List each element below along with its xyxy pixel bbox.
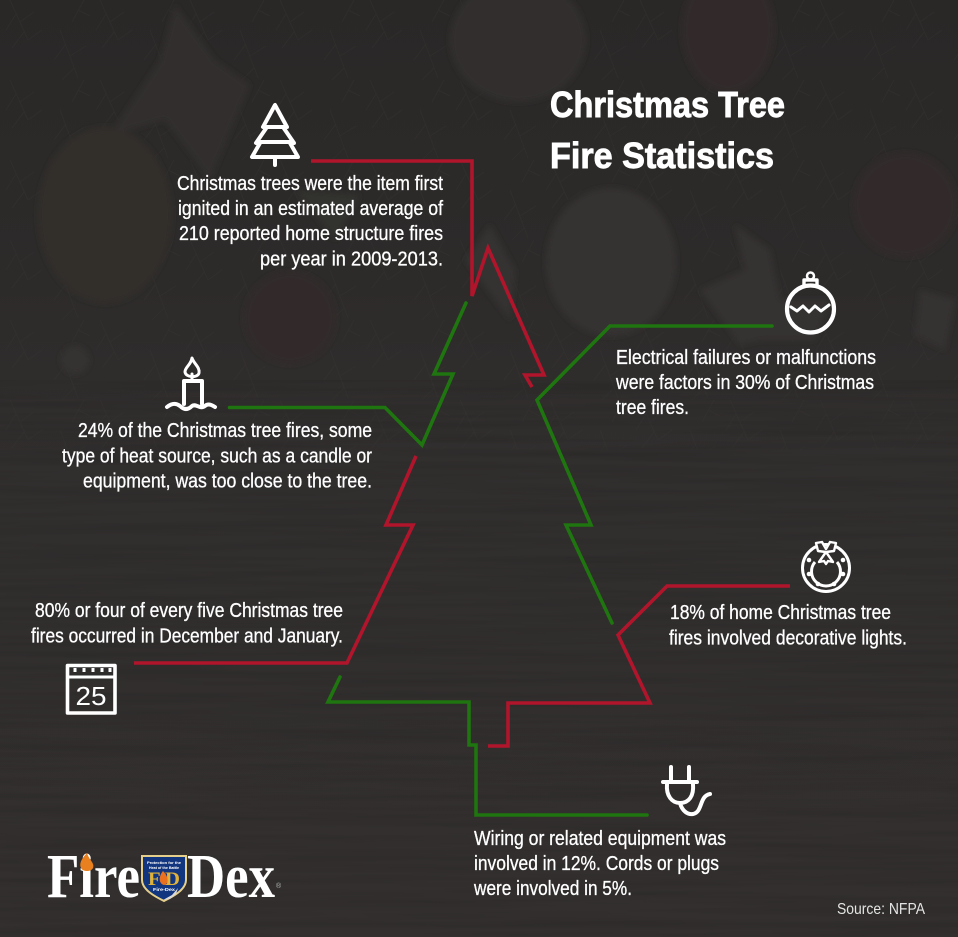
tree outline: red lower-right segment — [488, 586, 790, 746]
text: heat source: type of heat source, such as a candle or — [62, 446, 372, 468]
text: decorative lights — [669, 602, 907, 650]
text: items first ignited: per year in 2009-2013. — [260, 248, 443, 270]
icon: bauble — [787, 272, 834, 332]
text: decorative lights: fires involved decorative lights. — [669, 628, 907, 650]
text: wiring: were involved in 5%. — [473, 878, 632, 900]
logo: Fire-Dex: F D — [148, 869, 180, 890]
icon: tree — [252, 105, 298, 165]
title: Christmas Tree — [550, 84, 785, 125]
source: Source: NFPA — [837, 901, 925, 918]
text: heat source — [62, 420, 372, 492]
logo: Fire-Dex — [47, 843, 282, 911]
tree outline: green right segment — [537, 326, 772, 623]
text: electrical failures: were factors in 30% of Christmas — [615, 372, 874, 394]
text: heat source: 24% of the Christmas tree fires, some — [78, 420, 372, 442]
icon: plug — [663, 767, 710, 814]
logo: Fire-Dex: Fire — [47, 843, 140, 911]
logo: Fire-Dex: Dex — [187, 843, 275, 911]
text: wiring: Wiring or related equipment was — [474, 828, 726, 850]
logo: Fire-Dex: ® — [276, 882, 282, 890]
text: wiring: involved in 12%. Cords or plugs — [474, 853, 719, 875]
text: wiring — [473, 828, 726, 900]
icon: calendar — [67, 666, 115, 713]
text: heat source: equipment, was too close to the tree. — [83, 470, 372, 492]
tree outline: green bottom segment — [328, 677, 647, 815]
logo: Fire-Dex: Heat of the Battle — [149, 865, 180, 870]
text: December and January: 80% or four of every five Christmas tree — [35, 600, 343, 622]
tree outline: green upper-left segment — [230, 303, 466, 445]
icon: candle — [167, 358, 215, 409]
text: electrical failures: Electrical failures or malfunctions — [616, 347, 876, 369]
tree outline: red top-right segment — [311, 161, 544, 387]
text: decorative lights: 18% of home Christmas tree — [670, 602, 891, 624]
title: Fire Statistics — [550, 135, 774, 176]
text: items first ignited: 210 reported home structure fires — [179, 223, 443, 245]
text: electrical failures: tree fires. — [616, 397, 689, 419]
tree outline: red left segment — [134, 456, 416, 663]
text: electrical failures — [615, 347, 876, 419]
text: items first ignited: ignited in an estimated average of — [178, 198, 443, 220]
text: items first ignited: Christmas trees were the item first — [177, 173, 443, 195]
icon: calendar: 25 — [76, 681, 106, 711]
logo: Fire-Dex: Fire-Dex — [153, 887, 176, 892]
logo: Fire-Dex: Protection for the — [147, 860, 182, 865]
text: December and January: fires occurred in December and January. — [31, 626, 343, 648]
title — [550, 84, 785, 176]
text: December and January — [31, 600, 343, 648]
text: items first ignited — [177, 173, 443, 270]
icon: wreath — [802, 542, 850, 592]
